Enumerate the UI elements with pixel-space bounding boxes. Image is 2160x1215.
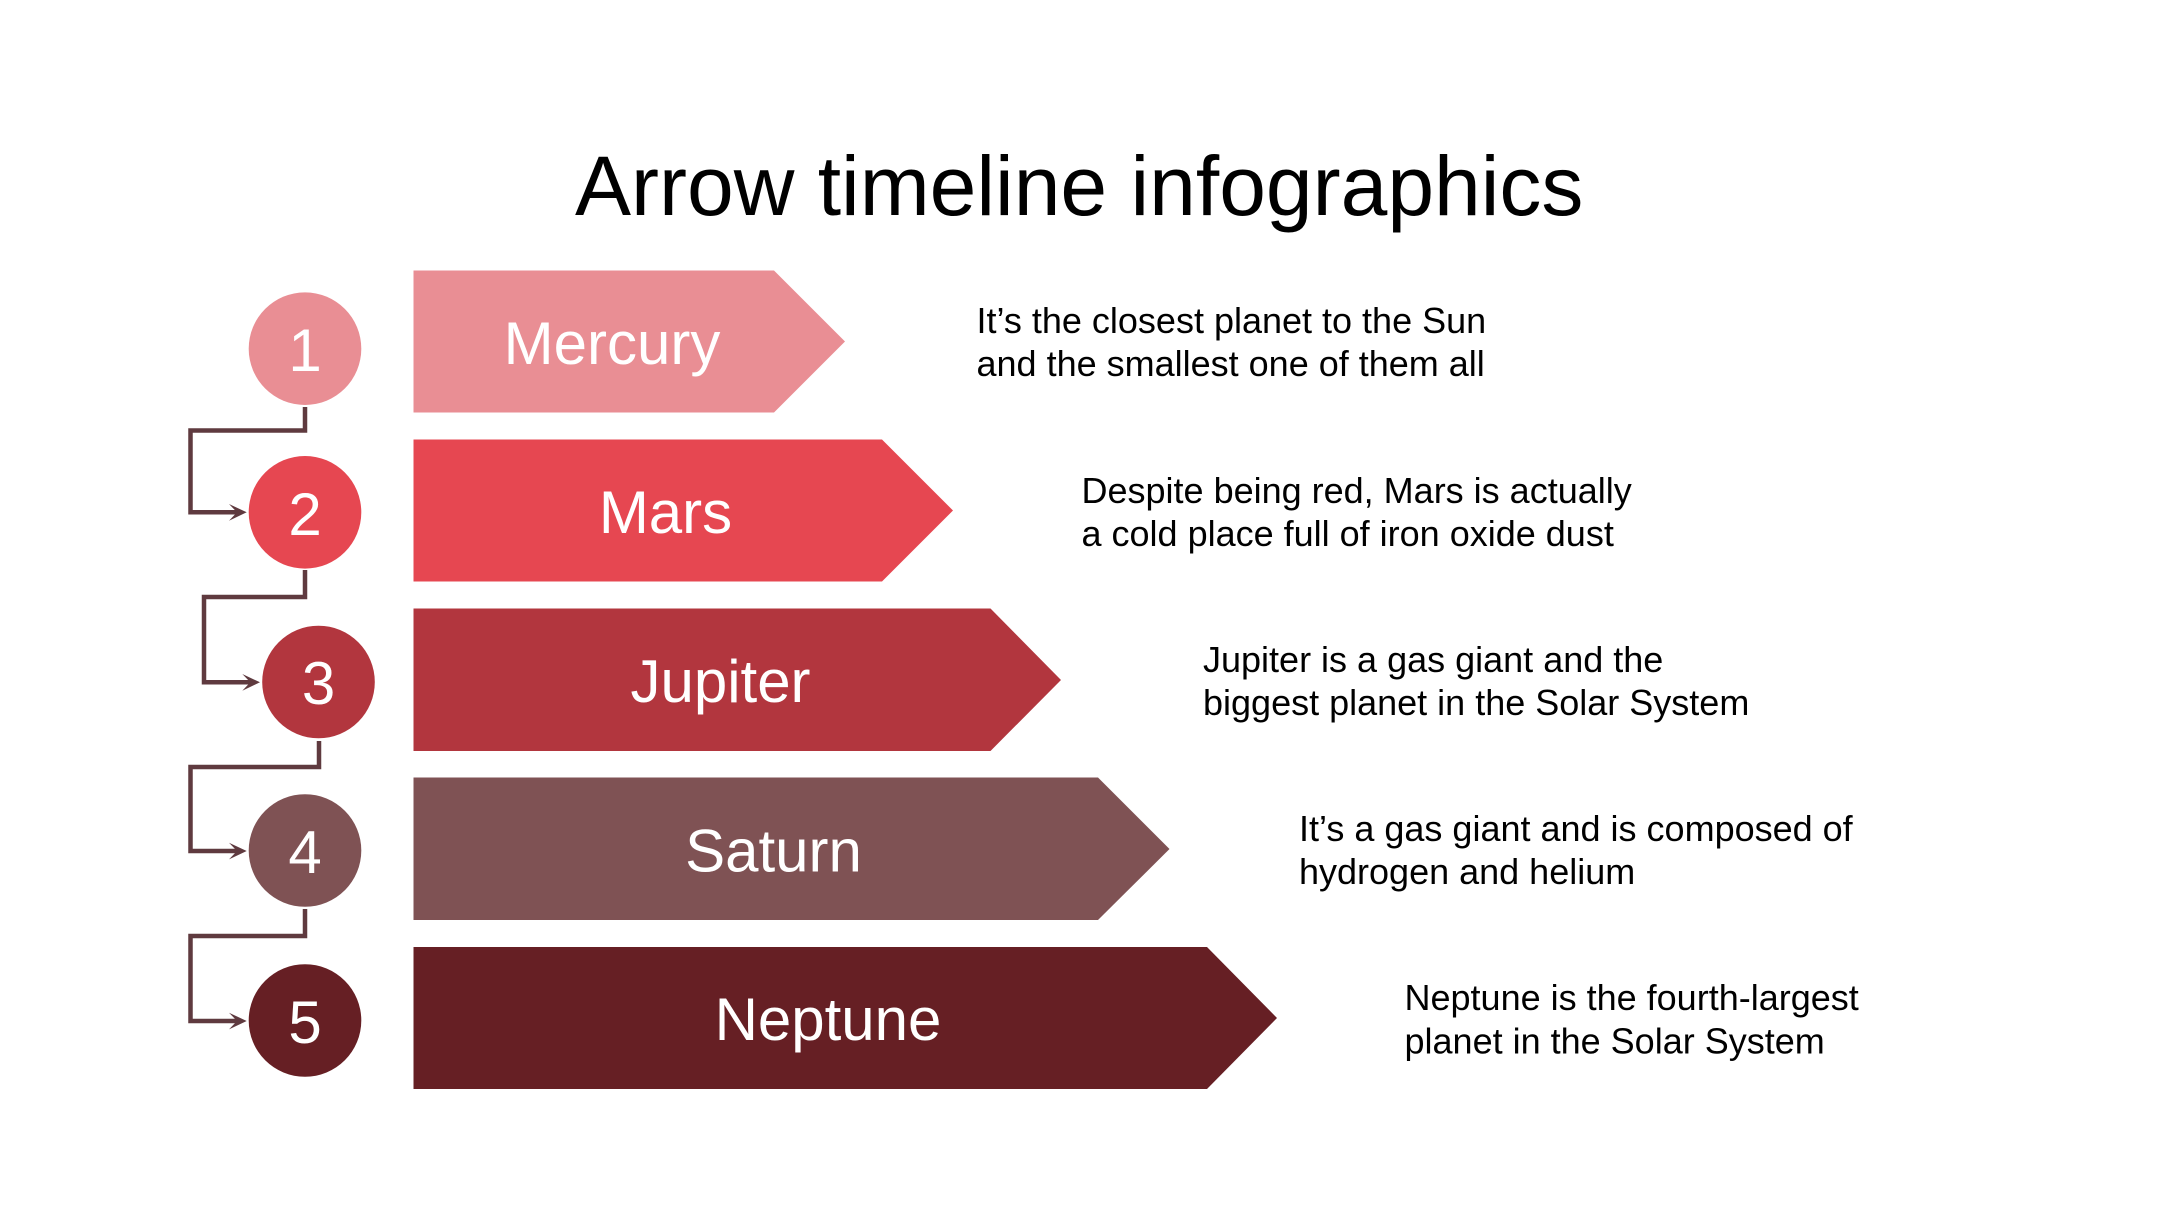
description: Mars: a cold place full of iron oxide dust <box>1082 513 1614 554</box>
circle: number 1 <box>249 292 361 405</box>
step 5: Neptune <box>249 947 1859 1089</box>
circle: number 2: 2 <box>288 481 322 548</box>
connector: 4 to 5 <box>190 909 305 1029</box>
arrow: Mercury: Mercury <box>504 310 720 377</box>
description: Saturn: hydrogen and helium <box>1299 851 1635 892</box>
step 2: Mars <box>249 440 1632 582</box>
description: Mercury: It’s the closest planet to the Sun <box>976 300 1486 341</box>
circle: number 2 <box>249 456 361 569</box>
arrow: Neptune <box>414 947 1277 1089</box>
step 3: Jupiter <box>262 608 1749 751</box>
step 1: Mercury <box>249 270 1486 412</box>
connector: 2 to 3 <box>204 570 305 691</box>
step 4: Saturn <box>249 778 1854 920</box>
circle: number 4: 4 <box>288 819 322 886</box>
title: Arrow timeline infographics <box>575 139 1583 233</box>
arrow: Mars: Mars <box>599 479 732 546</box>
arrow: Saturn <box>414 778 1170 920</box>
arrow: Mercury <box>414 270 845 412</box>
description: Neptune: Neptune is the fourth-largest <box>1404 977 1859 1018</box>
description: Mars: Despite being red, Mars is actually <box>1082 470 1632 511</box>
circle: number 3 <box>262 626 375 738</box>
connector: 1 to 2 <box>190 407 305 521</box>
description: Saturn: It’s a gas giant and is composed of <box>1299 808 1854 849</box>
arrow: Neptune: Neptune <box>715 986 941 1053</box>
arrow: Jupiter: Jupiter <box>630 648 811 715</box>
connector: 3 to 4 <box>190 741 319 859</box>
circle: number 3: 3 <box>302 650 335 717</box>
circle: number 5: 5 <box>288 989 322 1056</box>
circle: number 5 <box>249 964 361 1077</box>
circle: number 4 <box>249 794 361 907</box>
description: Jupiter: Jupiter is a gas giant and the <box>1203 639 1663 680</box>
arrow: Mars <box>414 440 953 582</box>
circle: number 1: 1 <box>288 317 322 384</box>
arrow: Saturn: Saturn <box>685 818 862 884</box>
description: Jupiter: biggest planet in the Solar System <box>1203 682 1749 723</box>
description: Neptune: planet in the Solar System <box>1404 1020 1825 1062</box>
arrow: Jupiter <box>414 608 1061 751</box>
description: Mercury: and the smallest one of them all <box>976 343 1485 384</box>
